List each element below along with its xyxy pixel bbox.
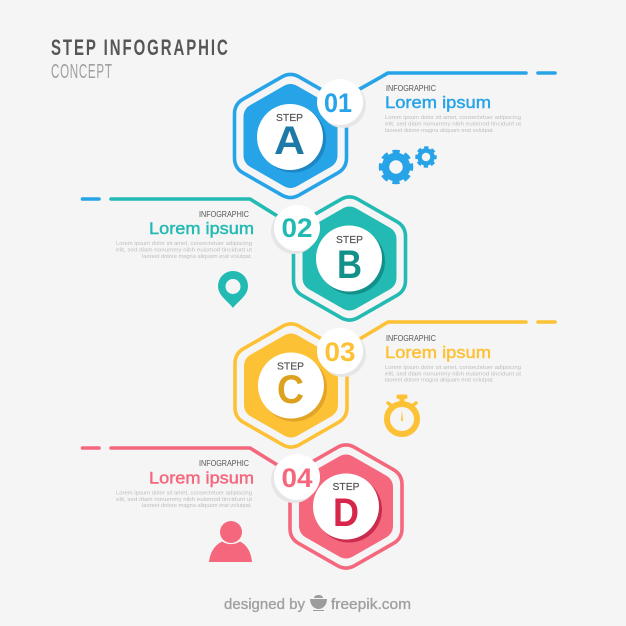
text block: step 1: Lorem ipsum dolor sit amet, consectetuer adipiscing xyxy=(385,115,521,121)
hexagon: step A xyxy=(234,74,346,198)
text block: step 3: Lorem ipsum dolor sit amet, consectetuer adipiscing xyxy=(385,365,521,371)
icon: gears xyxy=(381,148,435,182)
text block: step 4: Lorem ipsum xyxy=(149,468,254,488)
title: CONCEPT xyxy=(51,61,112,83)
badge: 01: 01 xyxy=(324,88,352,118)
text block: step 2: Lorem ipsum dolor sit amet, consectetuer adipiscing xyxy=(116,241,252,247)
badge: 01 xyxy=(317,79,366,128)
text block: step 4: laoreet dolore magna aliquam erat volutpat. xyxy=(142,503,252,509)
text block: step 1: INFOGRAPHIC xyxy=(386,84,436,93)
text block: step 3: INFOGRAPHIC xyxy=(386,334,436,343)
badge: 04 xyxy=(271,454,320,503)
text block: step 1 xyxy=(385,84,521,134)
text block: step 4 xyxy=(116,459,254,509)
text block: step 4: elit, sed diam nonummy nibh euismod tincidunt ut xyxy=(116,497,252,503)
text block: step 1: Lorem ipsum xyxy=(385,93,491,112)
connector line: step 3 xyxy=(358,322,555,340)
badge: 02: 02 xyxy=(282,213,312,243)
connector line: step 2 xyxy=(82,199,279,217)
connector line: step 1 xyxy=(358,73,555,90)
icon: stopwatch xyxy=(387,394,417,434)
text block: step 2: laoreet dolore magna aliquam erat volutpat. xyxy=(142,254,252,260)
footer credit: designed by xyxy=(224,596,305,613)
hexagon: step A: STEP xyxy=(276,112,303,124)
text block: step 3: elit, sed diam nonummy nibh euismod tincidunt ut xyxy=(385,372,521,378)
icon: person xyxy=(209,521,252,562)
footer credit xyxy=(224,595,411,613)
hexagon: step D: D xyxy=(333,491,359,535)
title: STEP INFOGRAPHIC xyxy=(51,35,228,60)
text block: step 4: INFOGRAPHIC xyxy=(199,459,249,468)
text block: step 3 xyxy=(385,334,521,384)
icon: location pin xyxy=(218,271,248,308)
connector line: step 4 xyxy=(82,448,279,466)
badge: 04: 04 xyxy=(282,463,312,493)
hexagon: step B: B xyxy=(337,243,362,287)
text block: step 2: Lorem ipsum xyxy=(149,219,254,238)
text block: step 2 xyxy=(116,210,254,260)
text block: step 2: elit, sed diam nonummy nibh euismod tincidunt ut xyxy=(116,248,252,254)
badge: 02 xyxy=(271,205,320,254)
text block: step 1: elit, sed diam nonummy nibh euismod tincidunt ut xyxy=(385,122,521,128)
hexagon: step B: STEP xyxy=(336,234,363,246)
text block: step 4: Lorem ipsum dolor sit amet, consectetuer adipiscing xyxy=(116,490,252,496)
footer credit: freepik.com xyxy=(331,596,411,613)
hexagon: step B xyxy=(294,197,406,320)
text block: step 3: laoreet dolore magna aliquam erat volutpat. xyxy=(385,378,494,384)
text block: step 2: INFOGRAPHIC xyxy=(199,210,249,219)
hexagon: step C xyxy=(235,324,347,447)
hexagon: step D xyxy=(290,445,402,568)
hexagon: step D: STEP xyxy=(332,481,360,493)
text block: step 3: Lorem ipsum xyxy=(385,343,491,362)
text block: step 1: laoreet dolore magna aliquam erat volutpat. xyxy=(385,128,494,134)
hexagon: step C: STEP xyxy=(277,360,304,372)
hexagon: step A: A xyxy=(274,119,305,163)
badge: 03 xyxy=(317,328,366,377)
badge: 03: 03 xyxy=(324,337,356,367)
hexagon: step C: C xyxy=(277,368,304,412)
title xyxy=(51,35,228,83)
